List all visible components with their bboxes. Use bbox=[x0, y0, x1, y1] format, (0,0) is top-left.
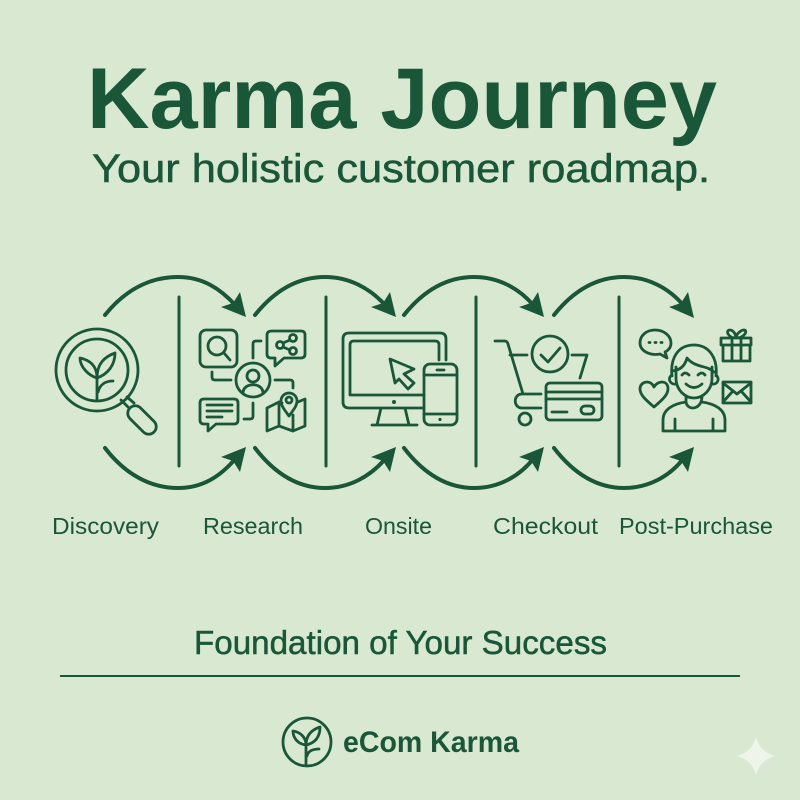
cursor bbox=[390, 359, 414, 389]
search box bbox=[200, 330, 237, 367]
monitor bbox=[343, 333, 446, 425]
message bubble bbox=[200, 399, 238, 431]
cart bbox=[495, 341, 541, 425]
person bbox=[663, 345, 725, 431]
label: Research: Research bbox=[203, 513, 303, 539]
label: Checkout: Checkout bbox=[493, 513, 599, 539]
arrow: onsite to checkout bbox=[404, 277, 544, 317]
label: Post-Purchase: Post-Purchase bbox=[619, 513, 773, 539]
seven glyph bbox=[572, 355, 587, 378]
arrow: checkout to post-purchase bbox=[554, 277, 694, 318]
sparkle mark bbox=[737, 737, 775, 775]
icon: magnifier with plant bbox=[56, 329, 159, 437]
logo text: eCom Karma bbox=[343, 726, 519, 759]
credit card bbox=[546, 383, 602, 420]
bottom arrows bbox=[105, 447, 694, 488]
arrow: bottom onsite to checkout bbox=[404, 447, 544, 488]
connectors bbox=[212, 341, 293, 419]
phone bbox=[424, 364, 457, 425]
logo: eCom Karma bbox=[283, 718, 519, 766]
gift bbox=[721, 330, 751, 361]
user circle bbox=[236, 363, 270, 397]
heart bbox=[640, 382, 668, 407]
envelope bbox=[723, 382, 751, 403]
logo mark bbox=[283, 718, 331, 766]
icon: cart and card bbox=[495, 336, 602, 425]
arrow: research to onsite bbox=[255, 277, 396, 317]
speech bubble bbox=[640, 330, 671, 358]
check circle bbox=[532, 336, 568, 372]
icon: desktop and phone bbox=[343, 333, 457, 425]
foundation heading: Foundation of Your Success bbox=[194, 624, 607, 661]
label: Discovery: Discovery bbox=[52, 513, 160, 539]
arrow: discovery to research bbox=[105, 277, 246, 317]
stage labels bbox=[52, 513, 773, 539]
map with pin bbox=[267, 393, 305, 431]
arrow: bottom research to onsite bbox=[255, 447, 396, 488]
subtitle: Your holistic customer roadmap. bbox=[92, 147, 710, 191]
arrow: bottom checkout to post-purchase bbox=[554, 447, 694, 488]
top arrows bbox=[105, 277, 694, 318]
icon: happy customer bbox=[640, 330, 751, 431]
title: Karma Journey bbox=[87, 51, 717, 147]
icon: research cluster bbox=[200, 330, 305, 431]
label: Onsite: Onsite bbox=[365, 513, 432, 539]
share bubble bbox=[267, 331, 305, 366]
arrow: bottom discovery to research bbox=[105, 447, 246, 488]
